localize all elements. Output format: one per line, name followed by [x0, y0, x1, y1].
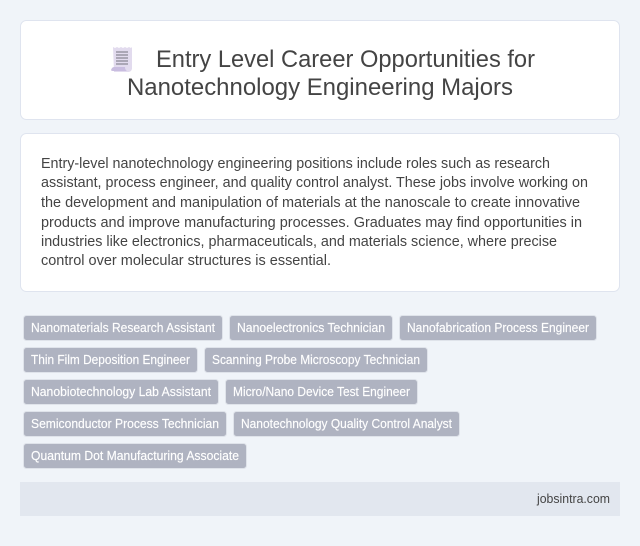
title [127, 46, 535, 101]
tag: Nanobiotechnology Lab Assistant [24, 380, 218, 404]
tag: Thin Film Deposition Engineer [24, 348, 198, 372]
tag: Nanomaterials Research Assistant [24, 316, 222, 340]
tag: Nanotechnology Quality Control Analyst [234, 412, 460, 436]
title: Nanotechnology Engineering Majors [127, 74, 513, 101]
tag: Nanomaterials Research Assistant: Nanomaterials Research Assistant [31, 321, 216, 335]
tag: Nanobiotechnology Lab Assistant: Nanobiotechnology Lab Assistant [31, 385, 212, 399]
tag: Micro/Nano Device Test Engineer: Micro/Nano Device Test Engineer [233, 385, 410, 399]
footer source text: jobsintra.com [536, 492, 610, 506]
tag: Nanoelectronics Technician [230, 316, 392, 340]
description text: industries like electronics, pharmaceuticals, and materials science, where precise [41, 234, 557, 250]
tag: Thin Film Deposition Engineer: Thin Film Deposition Engineer [31, 353, 190, 367]
description text: the development and manipulation of materials at the nanoscale to create innovative [41, 195, 580, 211]
description panel [20, 134, 620, 292]
footer bar [20, 482, 620, 516]
tag: Quantum Dot Manufacturing Associate: Quantum Dot Manufacturing Associate [31, 449, 239, 463]
tag: Nanotechnology Quality Control Analyst: Nanotechnology Quality Control Analyst [241, 417, 453, 431]
title: Entry Level Career Opportunities for [156, 46, 535, 73]
tag: Quantum Dot Manufacturing Associate [24, 444, 246, 468]
description text: products and improve manufacturing processes. Graduates may find opportunities in [41, 215, 582, 231]
tag: Semiconductor Process Technician [24, 412, 226, 436]
description text [41, 156, 588, 269]
description text: Entry-level nanotechnology engineering positions include roles such as research [41, 156, 550, 172]
header panel [20, 20, 620, 120]
tag: Micro/Nano Device Test Engineer [226, 380, 418, 404]
tag: Nanofabrication Process Engineer [400, 316, 596, 340]
description text: assistant, process engineer, and quality control analyst. These jobs involve working on [41, 175, 588, 191]
tag: Semiconductor Process Technician: Semiconductor Process Technician [31, 417, 219, 431]
job role tags [24, 316, 596, 468]
tag: Nanoelectronics Technician: Nanoelectronics Technician [237, 321, 385, 335]
tag: Nanofabrication Process Engineer: Nanofabrication Process Engineer [407, 321, 589, 335]
tag: Scanning Probe Microscopy Technician [204, 348, 428, 372]
icon: document scroll [111, 47, 132, 72]
tag: Scanning Probe Microscopy Technician: Scanning Probe Microscopy Technician [212, 353, 420, 367]
description text: control over molecular structures is essential. [41, 253, 331, 269]
